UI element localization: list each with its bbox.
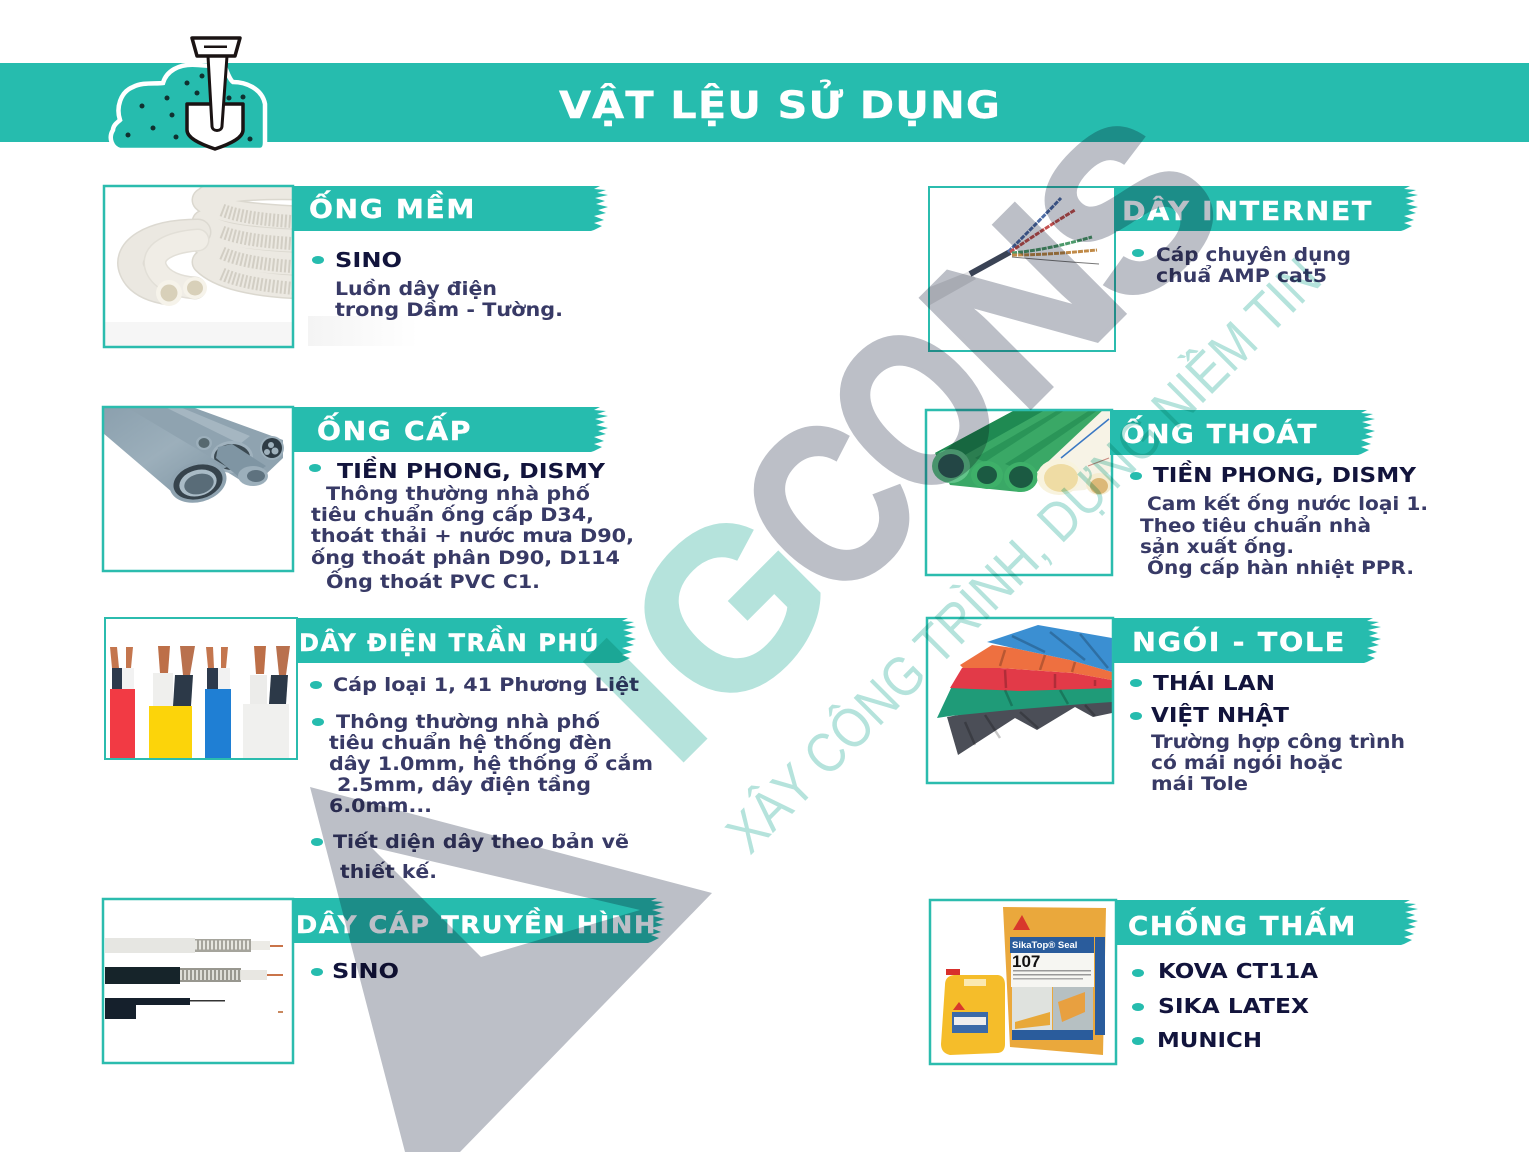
- photo: coaxial cables: [105, 938, 283, 1019]
- watermark letters: [547, 67, 1270, 799]
- text block: [1130, 461, 1428, 579]
- panel: dây cáp truyền hình: [103, 898, 665, 1063]
- text block: [312, 248, 563, 321]
- panel: ngói tole: [927, 618, 1405, 795]
- text block: Cáp loại 1, 41 Phương Liệt: [333, 674, 639, 696]
- watermark letters: I: [547, 602, 744, 799]
- text block: sản xuất ống.: [1140, 535, 1294, 558]
- heading band: NGÓI - TOLE: [1132, 626, 1346, 658]
- text block: [311, 959, 399, 983]
- watermark letters: C: [692, 369, 967, 644]
- text block: Theo tiêu chuẩn nhà: [1140, 514, 1371, 537]
- title: VẬT LỆU SỬ DỤNG: [559, 79, 1001, 127]
- photo frame: [929, 187, 1115, 351]
- text block: THÁI LAN: [1153, 671, 1275, 695]
- photo frame: [103, 407, 293, 571]
- text block: có mái ngói hoặc: [1151, 752, 1343, 774]
- text block: Ống thoát PVC C1.: [326, 567, 540, 593]
- text block: tiêu chuẩn ống cấp D34,: [311, 503, 594, 526]
- text block: Cam kết ống nước loại 1.: [1147, 492, 1428, 515]
- heading band: ỐNG MỀM: [309, 189, 476, 225]
- text block: Trường hợp công trình: [1151, 731, 1405, 753]
- heading band: [1115, 186, 1418, 231]
- text block: [309, 457, 634, 593]
- photo: roof sheets: [937, 625, 1112, 755]
- heading band: [293, 186, 608, 231]
- text block: SINO: [335, 248, 402, 272]
- heading band: ỐNG CẤP: [317, 411, 472, 447]
- panel: ống cấp: [103, 407, 634, 593]
- text block: ống thoát phân D90, D114: [311, 546, 620, 569]
- photo frame: [103, 899, 293, 1063]
- heading band: DÂY INTERNET: [1122, 195, 1373, 227]
- text block: Luồn dây điện: [335, 277, 497, 300]
- watermark letters: S: [985, 67, 1270, 352]
- photo frame: [926, 410, 1112, 575]
- heading band: [1110, 410, 1375, 455]
- photo: waterproofing bag and can: SikaTop® Seal: [1012, 940, 1077, 951]
- text block: 2.5mm, dây điện tầng: [337, 773, 591, 796]
- heading band: [1113, 618, 1381, 663]
- text block: KOVA CT11A: [1158, 959, 1319, 983]
- heading band: [1116, 900, 1418, 945]
- photo: electric wires: [110, 646, 290, 758]
- photo: waterproofing bag and can: 107: [1012, 952, 1040, 971]
- text block: [1130, 671, 1405, 795]
- watermark letters: O: [780, 275, 1051, 546]
- heading band: CHỐNG THẤM: [1128, 906, 1357, 942]
- text block: [1132, 244, 1351, 287]
- heading band: DÂY CÁP TRUYỀN HÌNH: [296, 906, 657, 939]
- heading band: [293, 407, 608, 452]
- text block: Thông thường nhà phố: [326, 482, 590, 505]
- text block: Tiết diện dây theo bản vẽ: [333, 830, 629, 853]
- photo frame: [104, 186, 293, 347]
- text block: TIỀN PHONG, DISMY: [1153, 461, 1417, 487]
- photo: waterproofing bag and can: [941, 907, 1106, 1055]
- photo frame: [927, 618, 1113, 783]
- text block: MUNICH: [1157, 1028, 1262, 1052]
- panel: chống thấm: [930, 900, 1418, 1064]
- panel: ống mềm: [104, 186, 608, 347]
- text block: trong Dầm - Tường.: [335, 298, 563, 321]
- text block: [1132, 959, 1319, 1052]
- fade under text: [308, 316, 418, 346]
- text block: 6.0mm...: [329, 795, 432, 817]
- text block: thoát thải + nước mưa D90,: [311, 525, 634, 547]
- text block: VIỆT NHẬT: [1151, 703, 1289, 727]
- text block: TIỀN PHONG, DISMY: [337, 457, 606, 483]
- panel: ống thoát: [926, 410, 1428, 579]
- panel: dây internet: [929, 186, 1418, 351]
- text block: Thông thường nhà phố: [336, 710, 600, 733]
- text block: dây 1.0mm, hệ thống ổ cắm: [329, 752, 653, 775]
- watermark letters: N: [876, 159, 1169, 452]
- heading band: ỐNG THOÁT: [1121, 414, 1318, 450]
- text block: SIKA LATEX: [1158, 994, 1310, 1018]
- photo frame: [930, 900, 1116, 1064]
- watermark tagline: XÂY CÔNG TRÌNH, DỰNG NIỀM TIN: [714, 246, 1333, 864]
- text block: SINO: [332, 959, 399, 983]
- photo: flexible conduit: [104, 188, 300, 347]
- heading band: [297, 618, 636, 663]
- watermark: VIGCONS logo: [310, 67, 1333, 1152]
- text block: Ống cấp hàn nhiệt PPR.: [1147, 553, 1414, 579]
- text block: [310, 674, 653, 883]
- text block: mái Tole: [1151, 773, 1248, 795]
- panel: dây điện trần phú: [105, 618, 653, 883]
- text block: thiết kế.: [340, 860, 437, 883]
- watermark letters: G: [578, 457, 880, 759]
- heading band: DÂY ĐIỆN TRẦN PHÚ: [299, 624, 600, 657]
- photo frame: [105, 618, 297, 759]
- text block: Cáp chuyên dụng: [1156, 244, 1351, 266]
- watermark triangle: [310, 787, 712, 1152]
- photo: grey PVC pipes: [103, 407, 284, 509]
- text block: tiêu chuẩn hệ thống đèn: [329, 731, 612, 754]
- photo: network cable: [930, 198, 1099, 305]
- text block: chuẩ AMP cat5: [1156, 264, 1327, 287]
- photo: green and cream pipes: [932, 410, 1113, 495]
- header banner: [0, 38, 1529, 150]
- icon: soil mound and shovel: [111, 38, 265, 150]
- heading band: [293, 898, 665, 943]
